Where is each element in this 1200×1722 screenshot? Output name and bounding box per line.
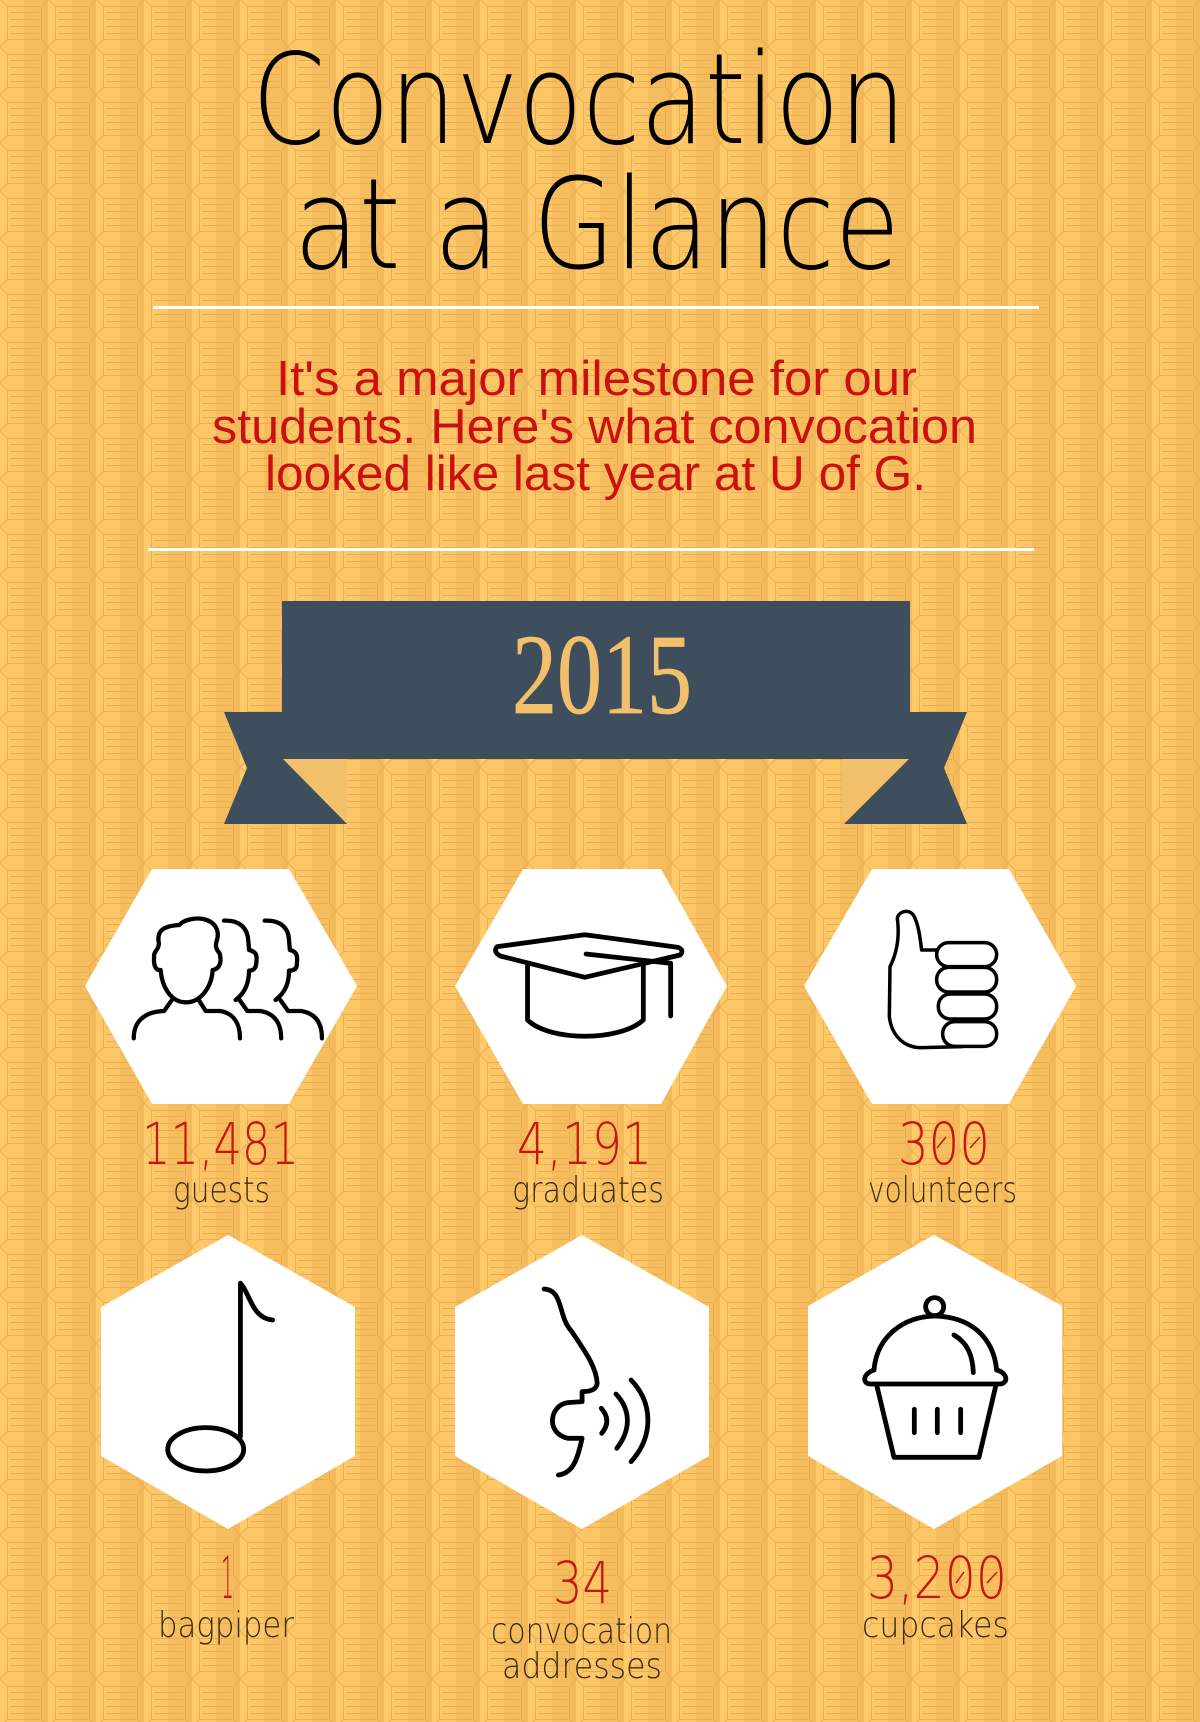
stat: guests xyxy=(85,869,357,1211)
label: cupcakes xyxy=(862,1605,1009,1646)
icon: speaking face xyxy=(544,1289,648,1475)
intro text: It's a major milestone for our xyxy=(276,352,917,406)
title xyxy=(252,26,906,298)
label: graduates xyxy=(512,1170,664,1211)
title: Convocation xyxy=(252,26,906,173)
label: volunteers xyxy=(868,1170,1017,1211)
hexagon xyxy=(85,869,357,1104)
number: 11,481 xyxy=(142,1110,299,1178)
stat: convocation addresses: addresses xyxy=(502,1646,662,1687)
hexagon xyxy=(455,869,727,1104)
label: guests xyxy=(173,1170,270,1211)
stat: bagpiper xyxy=(101,1235,355,1646)
icon: cupcake xyxy=(865,1298,1006,1457)
intro text: students. Here's what convocation xyxy=(212,400,977,454)
icon: graduation cap xyxy=(496,935,682,1036)
stat: convocation addresses xyxy=(455,1235,709,1687)
number: 4,191 xyxy=(517,1110,652,1178)
slashes in zeros xyxy=(937,1137,980,1148)
hexagon xyxy=(101,1235,355,1529)
stat: cupcakes xyxy=(808,1235,1062,1646)
ribbon shape xyxy=(224,601,967,824)
stat: graduates xyxy=(455,869,727,1211)
hexagon xyxy=(804,869,1076,1104)
title: at a Glance xyxy=(294,151,900,298)
ribbon banner 2015 xyxy=(224,601,967,824)
intro text: looked like last year at U of G. xyxy=(265,447,926,501)
icon: music note xyxy=(168,1283,273,1471)
stat: bagpiper: 1 xyxy=(221,1544,234,1612)
number: 34 xyxy=(553,1549,612,1617)
hexagon xyxy=(808,1235,1062,1529)
year: 2015 xyxy=(512,611,692,738)
icon: thumbs up xyxy=(889,911,997,1048)
stat: volunteers xyxy=(804,869,1076,1211)
icon: people xyxy=(134,918,322,1038)
number: 3,200 xyxy=(867,1544,1007,1612)
number: 300 xyxy=(898,1110,990,1178)
hexagon xyxy=(455,1235,709,1529)
intro text xyxy=(212,352,977,501)
slashes in zeros xyxy=(956,1572,997,1583)
label: convocation xyxy=(491,1611,672,1652)
ribbon folds xyxy=(283,759,909,824)
label: bagpiper xyxy=(158,1605,294,1646)
